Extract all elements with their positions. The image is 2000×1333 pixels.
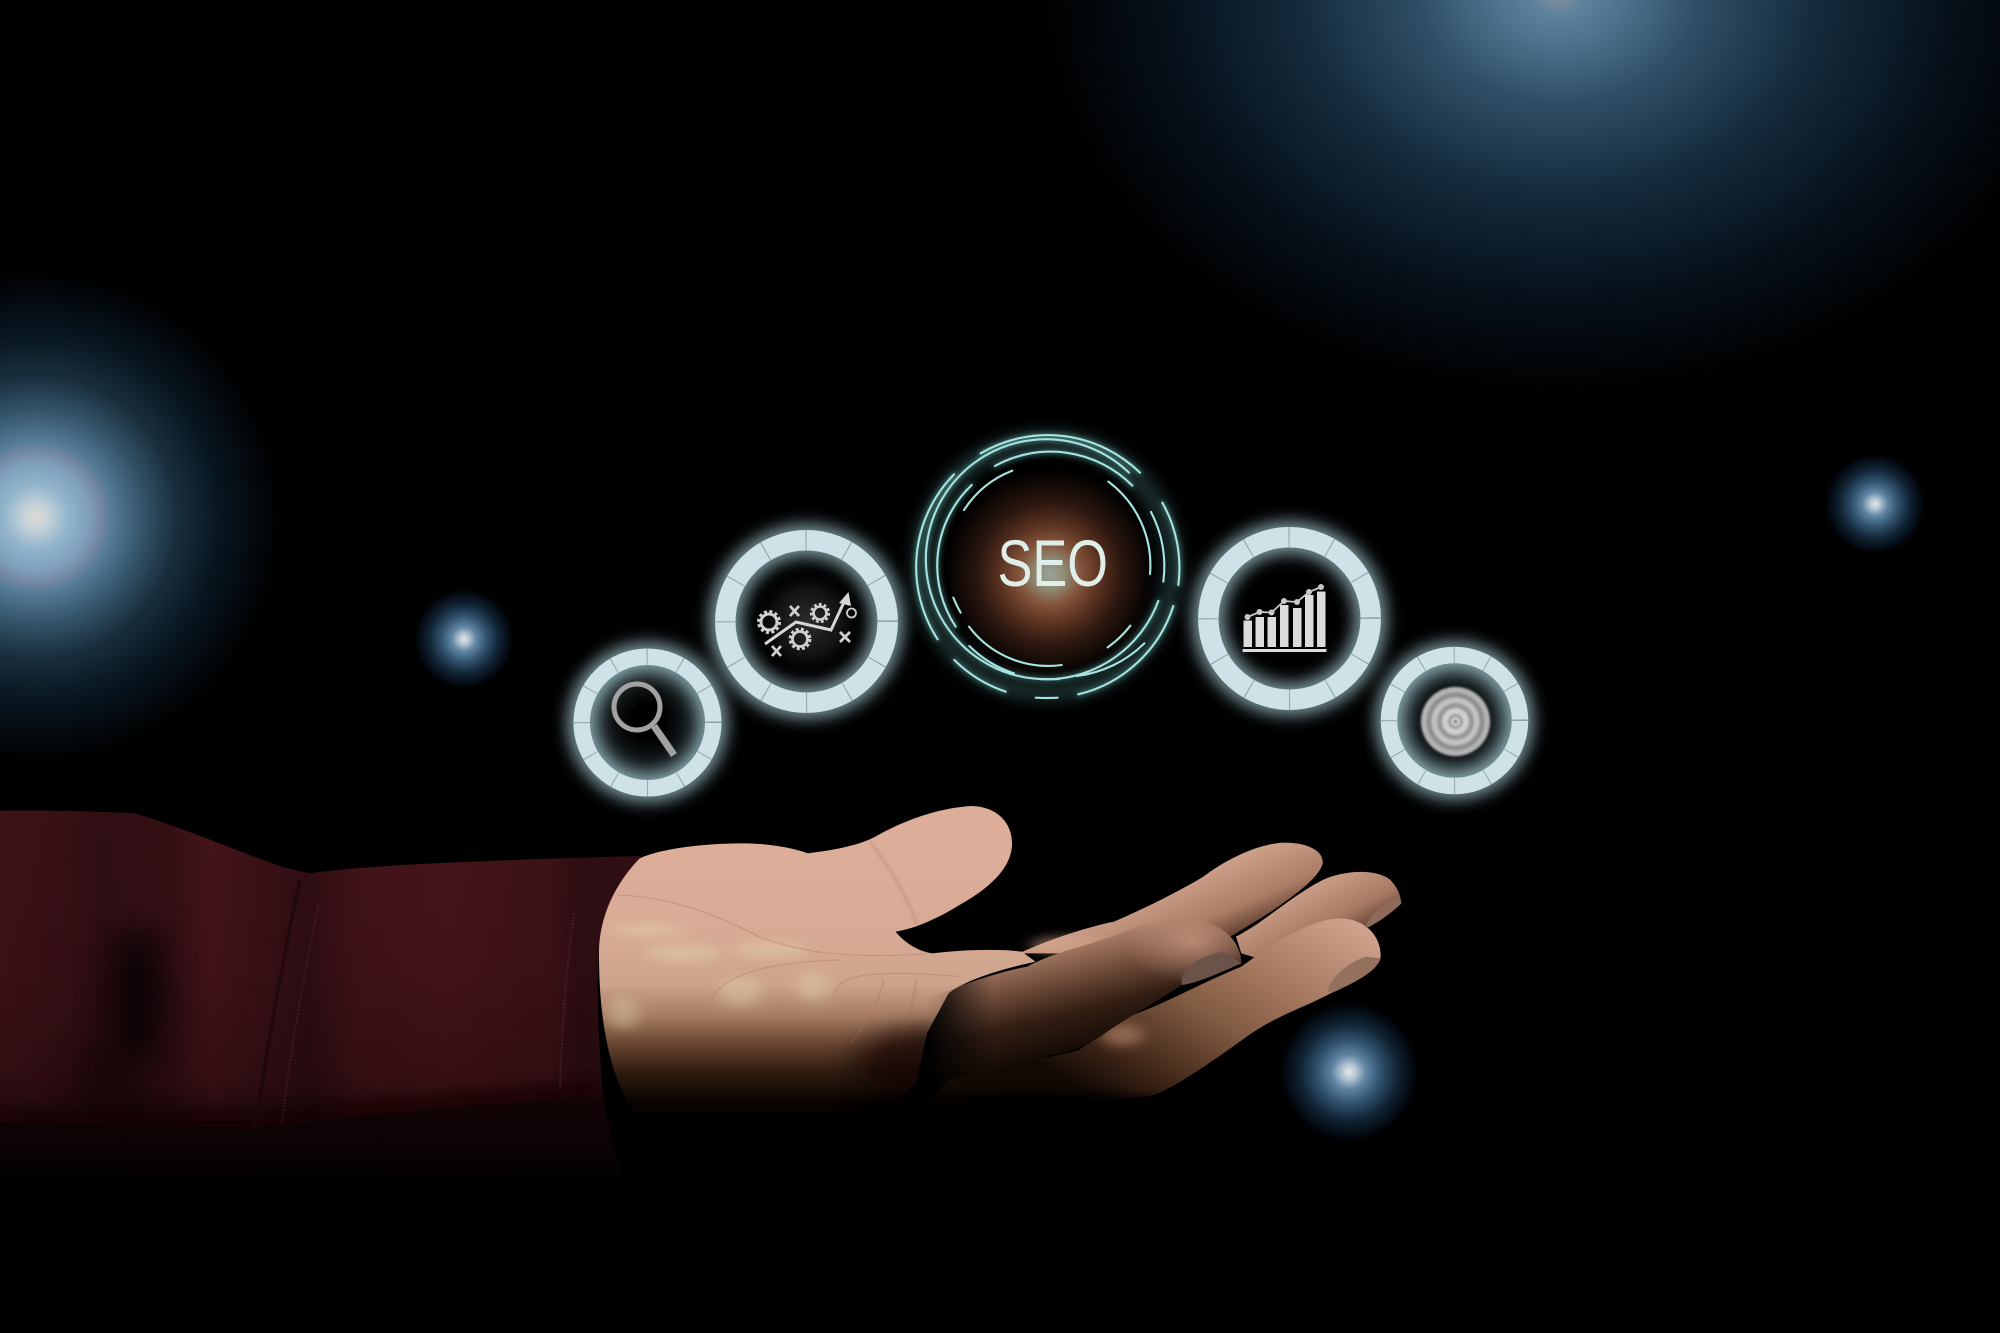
palm and thumb bbox=[599, 806, 1035, 1113]
light skin patches bbox=[607, 923, 829, 1030]
concentric broken rings bbox=[916, 435, 1179, 698]
far finger two bbox=[1236, 872, 1401, 967]
sleeve body bbox=[0, 811, 641, 1127]
small light flare right bbox=[1823, 452, 1927, 556]
base of far finger light bbox=[1030, 936, 1106, 954]
big finger nail bbox=[1328, 957, 1381, 993]
icon ring: magnifier bbox=[582, 656, 714, 788]
seo label: SEO bbox=[998, 526, 1108, 600]
icon: growth bars with trend line bbox=[1242, 584, 1326, 652]
ring glow bbox=[726, 540, 888, 702]
light flare below fingers bbox=[1277, 1000, 1421, 1144]
ring bbox=[582, 657, 713, 788]
teal haze behind rings bbox=[921, 440, 1173, 692]
icon ring: bar chart bbox=[1208, 537, 1371, 700]
ring segment ticks bbox=[1389, 655, 1520, 786]
sleeve fold shadow bbox=[0, 923, 603, 1140]
ring segment ticks bbox=[1208, 537, 1371, 700]
icon ring: strategy chart bbox=[725, 540, 888, 703]
ring segment ticks bbox=[725, 540, 888, 703]
icon haze bbox=[752, 566, 864, 678]
lit patch between fingers bbox=[1100, 1024, 1144, 1046]
palm lines bbox=[618, 895, 959, 1047]
foreground fingernail bbox=[1181, 952, 1241, 985]
far finger nail bbox=[1366, 897, 1401, 928]
shadow toward fingers bbox=[843, 1013, 937, 1090]
ring segment ticks bbox=[582, 657, 713, 788]
icon: bullseye bbox=[1421, 687, 1490, 756]
sleeve tonal bands bbox=[0, 811, 641, 1127]
foreground fingertip light bbox=[1122, 920, 1241, 985]
ring glow bbox=[1208, 538, 1370, 700]
brown centre glow bbox=[938, 462, 1162, 686]
hem line bbox=[0, 1121, 246, 1126]
left light flare bbox=[0, 272, 281, 762]
ring arcs bbox=[916, 435, 1179, 698]
inner haze bbox=[1396, 662, 1512, 778]
big lower finger bbox=[916, 918, 1381, 1113]
cuff seam bbox=[255, 880, 300, 1128]
small light flare left of icons bbox=[412, 587, 516, 691]
icon ring: target bbox=[1389, 655, 1520, 786]
inner haze bbox=[590, 664, 706, 780]
bottom fade to black bbox=[851, 1092, 1198, 1125]
ring glow copy bbox=[916, 435, 1179, 694]
ring bbox=[1208, 537, 1371, 700]
foreground finger bbox=[933, 920, 1242, 1078]
seo centre emblem bbox=[916, 435, 1179, 698]
icon: gears, crosses and rising arrow bbox=[758, 592, 856, 656]
icon: magnifying glass bbox=[614, 684, 674, 755]
placket stitching bbox=[560, 913, 574, 1090]
ring glow bbox=[1390, 656, 1520, 786]
ring glow bbox=[582, 656, 714, 788]
sleeve underside in shadow bbox=[0, 1097, 622, 1180]
ring bbox=[1389, 655, 1520, 786]
ring bbox=[725, 540, 888, 703]
palm creases and highlights bbox=[607, 842, 997, 1100]
cuff stitching bbox=[282, 903, 319, 1123]
finger body bbox=[933, 920, 1242, 1078]
hand bbox=[599, 806, 1401, 1125]
far finger one bbox=[1019, 843, 1323, 953]
sleeve bbox=[0, 811, 641, 1180]
top right light glow bbox=[1039, 0, 2000, 395]
thumb crease bbox=[870, 842, 917, 924]
